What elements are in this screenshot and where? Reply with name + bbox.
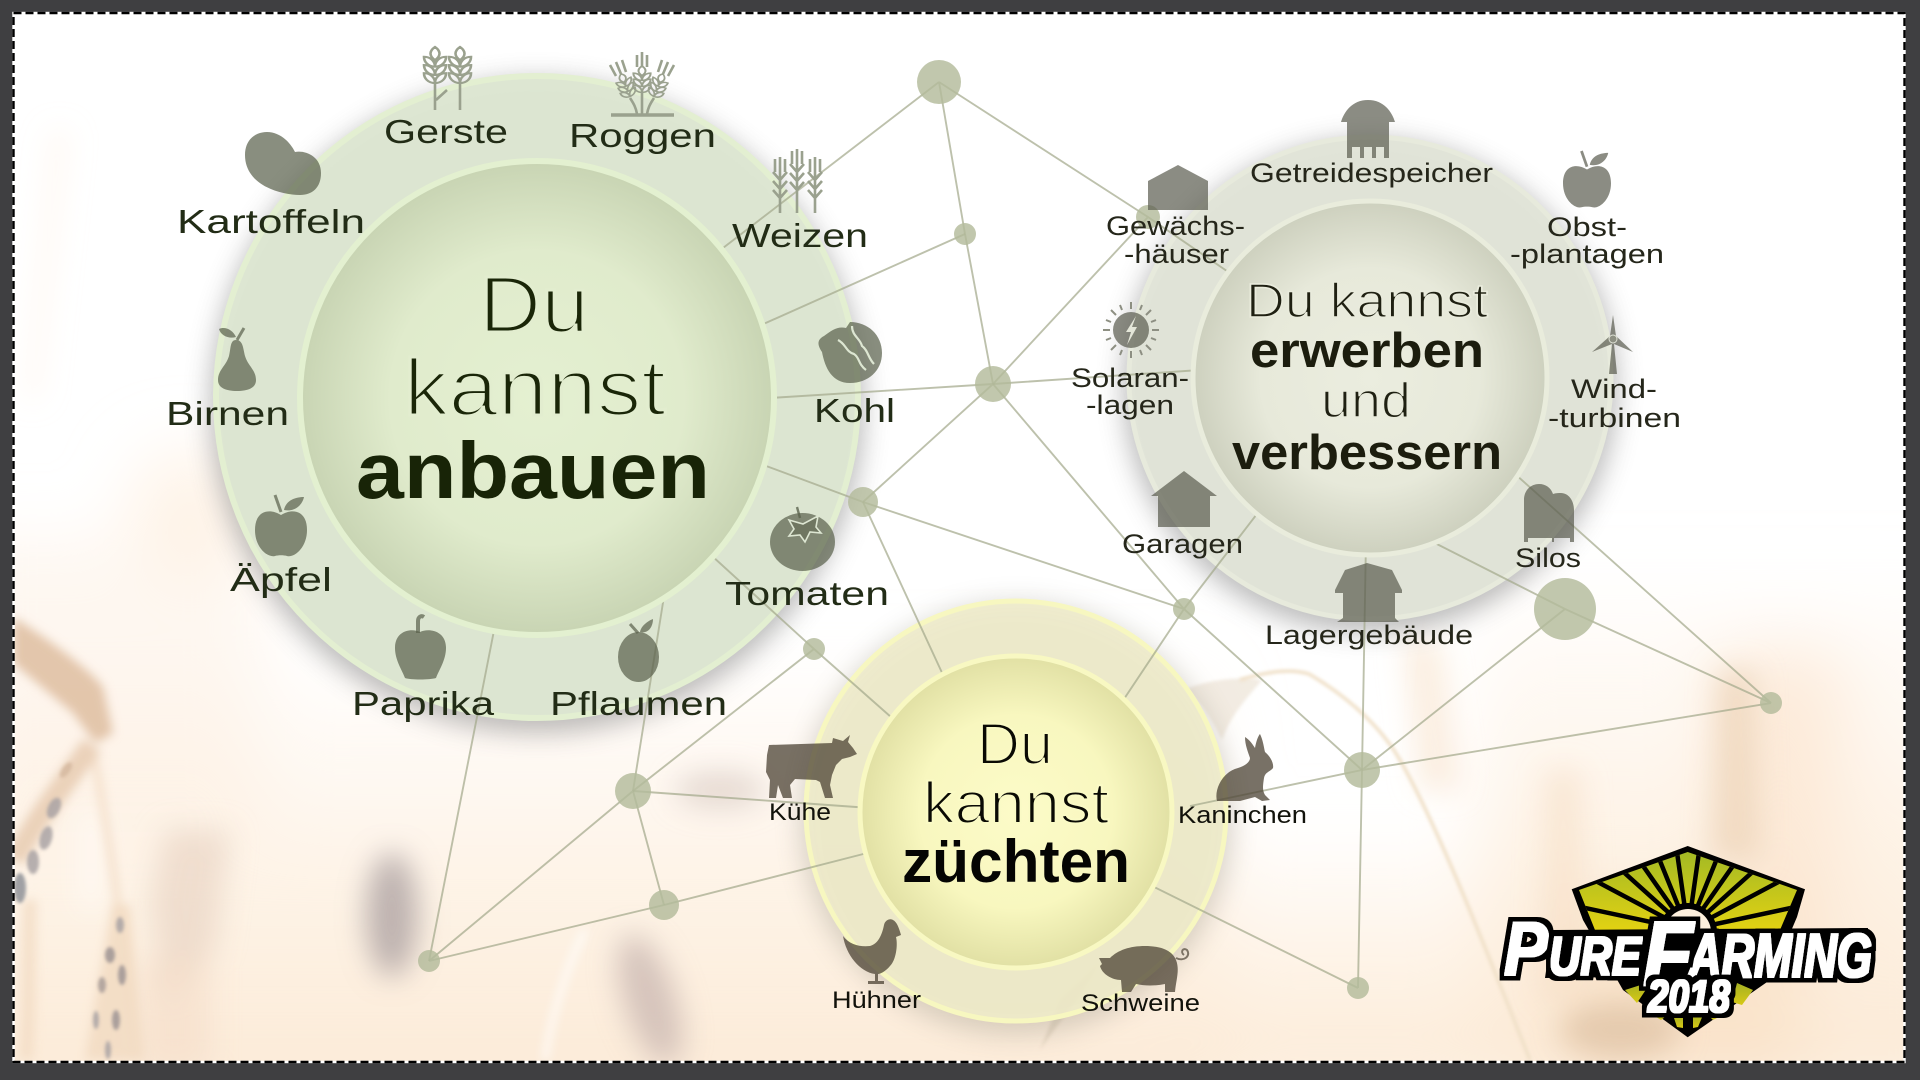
outer ring: erwerben <box>1129 137 1611 619</box>
logo wordmark: 2018 <box>1647 971 1730 1022</box>
erwerben labels: Wind- <box>1571 374 1657 404</box>
icon: cow <box>766 735 857 798</box>
heading: Du kannst züchten: Du <box>977 712 1053 777</box>
logo lower wedges <box>1625 982 1753 1028</box>
erwerben labels: -häuser <box>1124 239 1229 269</box>
heading: Du kannst erwerben und verbessern <box>1232 275 1502 480</box>
anbauen labels: Paprika <box>352 685 495 722</box>
anbauen labels: Birnen <box>166 395 289 432</box>
anbauen labels <box>166 113 895 722</box>
erwerben labels <box>1071 158 1681 650</box>
logo badge <box>1572 846 1805 1037</box>
icon: cabbage <box>818 322 882 383</box>
erwerben labels: -plantagen <box>1510 239 1664 269</box>
heading: Du kannst anbauen: anbauen <box>356 426 710 515</box>
outer ring: züchten <box>806 601 1226 1021</box>
heading: Du kannst anbauen <box>356 260 710 515</box>
heading: Du kannst züchten <box>902 712 1130 895</box>
icon: pear <box>218 328 256 391</box>
wheat stalk <box>1240 671 1530 1060</box>
icon: barley <box>424 47 471 110</box>
icon: storage building <box>1335 563 1402 622</box>
logo banner <box>1545 928 1868 978</box>
heading: Du kannst erwerben und verbessern: erwerben <box>1250 324 1484 378</box>
logo: Pure Farming 2018 <box>1500 846 1876 1038</box>
logo wordmark: URE <box>1549 925 1643 987</box>
icon: solar panel sun <box>1103 302 1159 358</box>
anbauen labels: Kartoffeln <box>177 203 365 240</box>
icon: silos <box>1524 484 1574 542</box>
icon: apple <box>255 495 307 556</box>
network connection lines <box>429 82 1771 988</box>
erwerben labels: Silos <box>1515 543 1581 573</box>
züchten labels: Hühner <box>832 987 921 1014</box>
anbauen labels: Äpfel <box>230 561 332 598</box>
anbauen labels: Pflaumen <box>550 685 727 722</box>
icon: greenhouse <box>1148 165 1208 210</box>
icon: pepper <box>395 616 446 680</box>
inner circle: anbauen <box>300 161 774 635</box>
erwerben labels: Garagen <box>1122 529 1243 559</box>
icon: hen <box>843 919 901 984</box>
anbauen labels: Weizen <box>732 217 868 254</box>
circle shadows <box>210 79 1617 1034</box>
heading: Du kannst züchten: kannst <box>923 771 1109 836</box>
icon: wheat <box>773 149 822 213</box>
icon: tomato <box>770 507 835 571</box>
heading: Du kannst anbauen: Du <box>479 260 589 349</box>
network nodes <box>418 60 1782 999</box>
icon: granary <box>1341 100 1395 158</box>
anbauen labels: Tomaten <box>725 575 889 612</box>
icon: potato <box>245 132 321 195</box>
icon: rabbit <box>1216 734 1273 801</box>
züchten labels: Schweine <box>1081 990 1200 1017</box>
icon: wind turbine <box>1592 315 1633 374</box>
inner circle: züchten <box>860 656 1172 968</box>
erwerben labels: -lagen <box>1086 390 1174 420</box>
erwerben labels: Lagergebäude <box>1265 620 1473 650</box>
icon: pig <box>1099 946 1188 992</box>
icon: plum <box>618 619 659 682</box>
logo wordmark: F <box>1643 903 1695 1005</box>
heading: Du kannst erwerben und verbessern: verbessern <box>1232 426 1502 480</box>
icon: garage <box>1151 471 1217 527</box>
heading: Du kannst erwerben und verbessern: Du kannst <box>1246 275 1488 328</box>
icon: rye <box>610 52 674 115</box>
züchten labels <box>769 799 1307 1017</box>
erwerben labels: Gewächs- <box>1106 211 1245 241</box>
züchten labels: Kühe <box>769 799 831 826</box>
erwerben labels: -turbinen <box>1548 403 1681 433</box>
logo sun rays <box>1579 852 1797 930</box>
heading: Du kannst erwerben und verbessern: und <box>1321 374 1411 428</box>
heading: Du kannst züchten: züchten <box>902 828 1130 895</box>
züchten labels: Kaninchen <box>1178 802 1307 829</box>
logo wordmark <box>1504 903 1872 1022</box>
erwerben labels: Obst- <box>1547 212 1627 242</box>
inner circle: erwerben <box>1193 201 1547 555</box>
erwerben labels: Getreidespeicher <box>1250 158 1493 188</box>
erwerben labels: Solaran- <box>1071 363 1189 393</box>
logo wordmark: P <box>1504 907 1548 992</box>
heading: Du kannst anbauen: kannst <box>404 343 666 432</box>
anbauen labels: Roggen <box>569 117 716 154</box>
icon: orchard apple <box>1563 151 1611 208</box>
anbauen labels: Gerste <box>384 113 508 150</box>
outer ring: anbauen <box>216 76 858 718</box>
anbauen labels: Kohl <box>814 392 895 429</box>
